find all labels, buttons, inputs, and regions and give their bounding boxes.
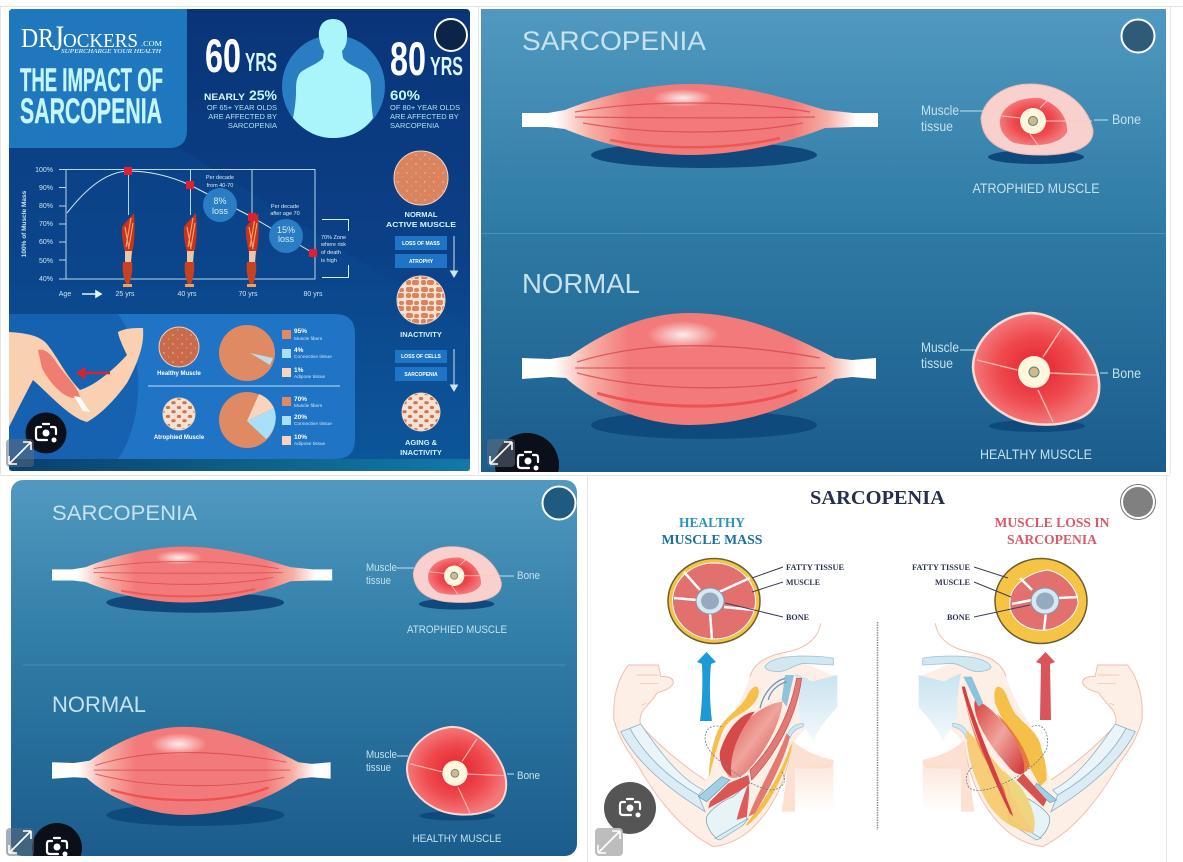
labels: cross-sections: MUSCLE — [935, 578, 970, 587]
labels: atrophied muscle: ATROPHIED MUSCLE — [972, 180, 1100, 196]
illustration: healthy arm — [614, 623, 837, 847]
legend: atrophied muscle — [282, 396, 332, 447]
stat: 60 years — [204, 29, 278, 130]
legend: healthy muscle: 95% — [294, 328, 307, 335]
panel: sarcopenia vs normal muscle, small — [11, 480, 577, 856]
heading: healthy muscle mass: MUSCLE MASS — [662, 533, 763, 548]
stat: 60 years: YRS — [245, 47, 277, 77]
chart: muscle mass by age: 70 yrs — [238, 291, 258, 298]
icon: expand, panel 4 — [595, 828, 623, 856]
labels: healthy muscle: Muscle — [921, 339, 959, 355]
column: muscle decline stages: ATROPHY — [409, 259, 434, 265]
labels: atrophied muscle: Muscle — [921, 102, 959, 118]
legend: healthy muscle: Connective tissue — [294, 354, 332, 360]
stat: 80 years: 60% — [390, 87, 421, 103]
title — [20, 62, 163, 131]
panel: sarcopenia vs normal muscle, large — [481, 9, 1166, 472]
heading: healthy muscle mass — [662, 516, 763, 548]
chart: muscle mass by age: Per decade — [206, 175, 234, 181]
labels: healthy muscle: tissue — [366, 762, 391, 774]
labels: atrophied muscle — [921, 102, 1141, 196]
legend: healthy muscle: 4% — [294, 347, 304, 354]
chart: muscle mass by age: is high — [321, 258, 337, 264]
labels: cross-sections: BONE — [786, 613, 809, 622]
stat: 60 years: 25% — [249, 87, 278, 103]
column: muscle decline stages: NORMAL — [405, 210, 438, 219]
labels: healthy muscle: Bone — [1112, 365, 1141, 381]
chart: muscle mass by age: loss — [278, 234, 294, 244]
heading: muscle loss in sarcopenia: SARCOPENIA — [1007, 533, 1098, 548]
muscle: atrophied spindle — [52, 547, 332, 613]
legend: healthy muscle: Adipose tissue — [294, 374, 326, 380]
labels: cross-sections: FATTY TISSUE — [786, 563, 844, 572]
muscle: atrophied spindle — [522, 84, 878, 168]
heading: muscle loss in sarcopenia: MUSCLE LOSS IN — [994, 516, 1110, 531]
labels: healthy muscle — [366, 749, 540, 845]
legend: healthy muscle: 1% — [294, 367, 304, 374]
header block — [9, 9, 187, 148]
stat: 80 years: OF 80+ YEAR OLDS — [390, 103, 460, 112]
chart: muscle mass by age: from 40-70 — [207, 183, 233, 189]
logo: SUPERCHARGE YOUR HEALTH — [61, 48, 161, 55]
icon: expand, panel 1 — [6, 439, 34, 467]
chart: muscle mass by age: 100% of Muscle Mass — [21, 190, 28, 257]
panel: sarcopenia vs normal muscle, large: NORMAL — [522, 268, 640, 299]
column: muscle decline stages — [386, 151, 458, 457]
chart: muscle mass by age: 80% — [39, 203, 53, 210]
labels: healthy muscle — [921, 339, 1141, 462]
stat: 60 years: SARCOPENIA — [228, 121, 277, 130]
labels: cross-sections: MUSCLE — [786, 578, 820, 587]
bottom band — [9, 459, 470, 471]
cross-section: atrophied — [981, 84, 1093, 164]
stat: 80 years: YRS — [430, 51, 463, 81]
panel: The Impact of Sarcopenia infographic — [9, 9, 470, 471]
labels: atrophied muscle — [366, 562, 540, 636]
legend: healthy muscle — [282, 328, 332, 380]
column: muscle decline stages: LOSS OF MASS — [402, 241, 441, 247]
icon: lens button, panel 1 — [26, 412, 66, 454]
chart: muscle mass by age: 90% — [39, 185, 53, 192]
pie chart: atrophied muscle — [219, 392, 276, 448]
chart: muscle mass by age: after age 70 — [270, 211, 300, 217]
labels: atrophied muscle: Bone — [517, 570, 540, 582]
labels: healthy muscle: Bone — [517, 770, 540, 782]
chart: muscle mass by age: 80 yrs — [303, 291, 323, 298]
labels: healthy muscle: tissue — [921, 355, 953, 371]
pie chart: healthy muscle — [219, 325, 275, 381]
chart: muscle mass by age: Age — [59, 291, 71, 298]
panel: sarcopenia vs normal muscle, large: SARCOPENIA — [522, 26, 706, 56]
stat: 80 years: SARCOPENIA — [390, 121, 439, 130]
labels: atrophied muscle: Bone — [1112, 111, 1141, 127]
heading: muscle loss in sarcopenia — [994, 516, 1110, 548]
title: THE IMPACT OF — [20, 62, 163, 98]
chart: muscle mass by age — [21, 167, 348, 298]
marker: panel 4 status dot — [1120, 484, 1156, 520]
legend: atrophied muscle: Connective tissue — [294, 421, 332, 427]
heading: healthy muscle mass: HEALTHY — [679, 516, 745, 531]
logo: J — [53, 18, 64, 58]
logo: .COM — [141, 40, 163, 48]
logo: DR — [21, 23, 54, 53]
stat: 60 years: NEARLY — [204, 92, 245, 102]
legend: healthy muscle: Muscle fibers — [294, 336, 323, 342]
chart: muscle mass by age: 8% — [213, 196, 227, 206]
labels: atrophied muscle: tissue — [366, 575, 391, 587]
cross-section: healthy — [407, 727, 506, 820]
legend: atrophied muscle: 70% — [294, 396, 307, 403]
panel: sarcopenia vs normal muscle, small: SARCOPENIA — [52, 502, 197, 525]
panel: sarcopenia vs normal muscle, small: NORMAL — [52, 692, 146, 717]
chart: muscle mass by age: loss — [212, 206, 228, 216]
muscle: normal spindle — [52, 727, 331, 826]
chart: muscle mass by age: 70% Zone — [321, 235, 346, 241]
chart: muscle mass by age: 25 yrs — [115, 291, 135, 298]
chart: muscle mass by age: 100% — [35, 167, 53, 174]
panel: muscle composition — [9, 314, 355, 459]
divider — [876, 622, 878, 830]
cross-section: healthy — [973, 313, 1099, 432]
cross-section: healthy thigh — [668, 558, 760, 644]
logo: OCKERS — [63, 30, 138, 52]
legend: atrophied muscle: 20% — [294, 414, 307, 421]
marker: panel 3 status dot — [542, 486, 576, 520]
labels: cross-sections: BONE — [947, 613, 970, 622]
stat: 80 years: ARE AFFECTED BY — [390, 112, 459, 121]
icon: expand, panel 3 — [6, 828, 34, 856]
legend: atrophied muscle: 10% — [294, 434, 307, 441]
cross-section: atrophied — [413, 547, 501, 610]
icon: expand, panel 2 — [487, 439, 515, 467]
stat: 60 years: 60 — [205, 29, 241, 82]
labels: healthy muscle: Muscle — [366, 749, 397, 761]
stat: 80 years — [390, 32, 463, 130]
legend: atrophied muscle: Adipose tissue — [294, 441, 326, 447]
icon: lens button, panel 3 — [32, 823, 82, 856]
panel: muscle composition: Atrophied Muscle — [154, 435, 205, 441]
stat: 60 years: OF 65+ YEAR OLDS — [207, 103, 277, 112]
labels: atrophied muscle: Muscle — [366, 562, 397, 574]
arrow: sarcopenia up — [1036, 652, 1055, 720]
labels: healthy muscle: HEALTHY MUSCLE — [980, 446, 1092, 462]
arrow: healthy up — [697, 652, 716, 721]
stat: 60 years: ARE AFFECTED BY — [208, 112, 277, 121]
chart: muscle mass by age: where risk — [320, 242, 346, 248]
chart: muscle mass by age: Per decade — [271, 204, 299, 210]
column: muscle decline stages: SARCOPENIA — [404, 372, 438, 378]
column: muscle decline stages: AGING & — [405, 438, 438, 447]
stat: 80 years: 80 — [390, 32, 426, 85]
chart: muscle mass by age: of death — [321, 250, 341, 256]
column: muscle decline stages: ACTIVE MUSCLE — [386, 220, 456, 229]
icon: lens button, panel 4 — [604, 782, 656, 834]
chart: muscle mass by age: 60% — [39, 239, 53, 246]
labels: atrophied muscle: ATROPHIED MUSCLE — [407, 624, 507, 636]
illustration: sarcopenic arm — [919, 623, 1142, 847]
chart: muscle mass by age: 40 yrs — [177, 291, 197, 298]
title: SARCOPENIA — [810, 487, 946, 509]
panel: muscle composition: Healthy Muscle — [157, 371, 202, 377]
panel: healthy vs sarcopenia anatomy — [589, 476, 1166, 861]
body silhouette in circle — [282, 19, 385, 138]
labels: healthy muscle: HEALTHY MUSCLE — [412, 833, 502, 845]
chart: muscle mass by age: 50% — [39, 258, 53, 265]
marker: panel 1 status dot — [435, 19, 467, 51]
cross-section: sarcopenic thigh — [995, 558, 1087, 644]
icon: flexed arm — [9, 328, 143, 427]
labels: cross-sections: FATTY TISSUE — [912, 563, 970, 572]
column: muscle decline stages: INACTIVITY — [400, 448, 442, 457]
legend: atrophied muscle: Muscle fibers — [294, 403, 323, 409]
labels: atrophied muscle: tissue — [921, 118, 953, 134]
icon: lens button, panel 2 — [495, 433, 559, 472]
column: muscle decline stages: LOSS OF CELLS — [401, 354, 442, 360]
column: muscle decline stages: INACTIVITY — [400, 330, 442, 339]
chart: muscle mass by age: 40% — [39, 276, 53, 283]
marker: panel 2 status dot — [1122, 20, 1154, 52]
muscle: normal spindle — [522, 313, 876, 439]
labels: cross-sections — [725, 563, 1030, 622]
chart: muscle mass by age: 70% — [39, 221, 53, 228]
logo — [21, 18, 163, 58]
chart: muscle mass by age: 15% — [277, 225, 295, 235]
title: SARCOPENIA — [20, 92, 162, 131]
